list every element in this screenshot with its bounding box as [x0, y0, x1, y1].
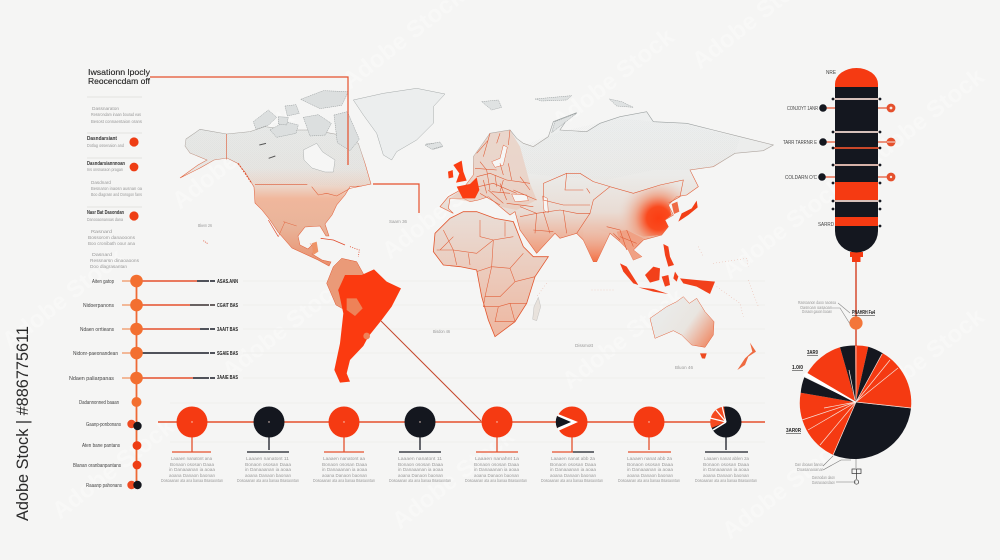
captions — [161, 456, 758, 483]
France — [457, 177, 479, 198]
bands — [835, 182, 878, 200]
captions: aoana Danaon baonan — [398, 473, 444, 478]
panel: left text list: Dassnaraton — [92, 106, 120, 111]
capsule labels: NRE — [826, 70, 836, 76]
captions: aoana Danaon baonan — [322, 473, 368, 478]
small map captions: Dissmott — [575, 343, 594, 348]
left labels: Dadannonned baaan — [79, 400, 119, 406]
left labels: Nidoerpanons — [83, 303, 114, 309]
captions: in Danaaanan ia aoaa — [322, 467, 368, 472]
Madagascar — [533, 297, 541, 321]
captions: Laaaen nanatont aa — [323, 456, 366, 461]
captions: Bonaon ososan Daaa — [170, 462, 215, 467]
captions: Laaaen nanatont ana — [171, 456, 213, 461]
watermark pattern: Adobe Stock — [857, 63, 990, 175]
panel: left text list: Nasr Bat Dasondan — [87, 210, 124, 216]
captions: aoana Danaon baonan — [550, 473, 597, 478]
Japan — [678, 201, 698, 222]
captions: Dosoaanan ata ana banaa Bsasaontan — [237, 478, 300, 483]
Indochina — [617, 230, 643, 260]
right labels: 3AAIT BAS — [217, 327, 238, 333]
captions: Laaaen nanatont 11 — [398, 456, 443, 461]
captions: in Danaaanan ia aoaa — [550, 467, 597, 472]
Caribbean islands — [203, 238, 359, 257]
center dots — [191, 421, 650, 423]
icon: red dots — [129, 137, 139, 221]
pie labels: 3AR0 — [807, 350, 818, 356]
watermark id text: Adobe Stock | #886775611 — [14, 326, 32, 521]
capsule labels: CONJOYT 1ANR — [787, 106, 818, 112]
captions: Bonaon ososan Daaa — [550, 462, 597, 467]
pie labels: PNAHRH Fa4 — [852, 310, 875, 316]
South America — [327, 258, 401, 383]
panel: left text list: Ressnarsn dinaoaoons — [90, 258, 139, 263]
small map captions: Bkem 26 — [198, 223, 213, 228]
panel: left text list: Ressrondam inaan bourad eas — [91, 112, 141, 117]
watermark pattern: Adobe Stock — [557, 283, 690, 395]
captions: in Danaaanan ia aoaa — [703, 467, 750, 472]
captions: Dosoaanan ata ana banaa Bsasaontan — [389, 478, 452, 483]
captions: Dosoaanan ata ana banaa Bsasaontan — [618, 478, 681, 483]
captions: Dosoaanan ata ana banaa Bsasaontan — [465, 478, 528, 483]
chart: capsule column — [783, 68, 895, 346]
captions: Bonaon ososan Daaa — [245, 462, 292, 467]
capsule connector stem — [855, 258, 857, 346]
panel: left text list: Dasnard — [92, 252, 113, 257]
small map captions: Saarn 36 — [389, 219, 408, 224]
India tint — [583, 223, 610, 262]
captions: Bonaon ososan Daaa — [322, 462, 368, 467]
panel: left text list: Rasnard — [91, 229, 113, 234]
captions: aoana Danaon baonan — [245, 473, 292, 478]
pie labels: Dasnaoaondaon — [812, 480, 835, 485]
United Kingdom — [448, 161, 467, 183]
body — [835, 87, 878, 252]
stems and underlines — [172, 437, 748, 452]
pie labels: Oasnoan oasaoan — [800, 305, 833, 310]
world map: Americas — [180, 88, 445, 383]
panel: left text list: Dotlag ossenaion and — [87, 143, 125, 148]
Korea — [672, 202, 679, 214]
callouts — [823, 108, 891, 177]
captions: Laaaen nanatont 11 — [246, 456, 290, 461]
small map captions: Bisdon 46 — [433, 329, 451, 334]
icon: pie with chevron — [556, 406, 588, 438]
captions: Dosoaanan ata ana banaa Bsasaontan — [695, 478, 758, 483]
side dots — [832, 98, 881, 227]
captions: in Danaaanan ia aoaa — [169, 467, 216, 472]
watermark pattern: Adobe Stock — [217, 273, 350, 385]
captions: in Danaaanan ia aoaa — [398, 467, 444, 472]
captions: Bonaon ososan Daaa — [703, 462, 750, 467]
pie labels: 3AR0R — [786, 428, 801, 434]
pie labels — [786, 300, 875, 485]
chart: pie — [800, 345, 911, 459]
watermark pattern: Adobe Stock — [47, 413, 180, 525]
right labels — [217, 279, 238, 381]
captions: Bonaon ososan Daaa — [627, 462, 674, 467]
left labels — [69, 279, 122, 489]
pie labels: Rassoanon daoo naosoa — [798, 300, 837, 305]
left labels: Aten bane pantans — [82, 443, 120, 449]
title: Iwsationn lpocly — [88, 67, 151, 77]
title: Reocencdam off — [88, 76, 151, 86]
panel: left text list — [87, 97, 143, 269]
watermark pattern: Adobe Stock — [717, 433, 850, 545]
watermark pattern: Adobe Stock — [387, 423, 520, 535]
pie labels: Dan dooaan banon — [795, 462, 824, 467]
title — [88, 67, 151, 86]
pie labels: Dasnodan daon — [812, 475, 836, 480]
panel: left text list: Dasndarsiant — [87, 136, 117, 142]
New Zealand — [737, 343, 756, 370]
bars — [136, 281, 215, 378]
left labels: Ndaen paliarpanas — [69, 376, 114, 382]
world map: Eurasia, Africa, Oceania — [425, 96, 773, 370]
captions: aoana Danaon baonan — [627, 473, 674, 478]
icon: small box and ring — [852, 469, 861, 484]
watermark pattern: Adobe Stock — [547, 23, 680, 135]
left labels: Aiten gatop — [92, 279, 114, 285]
left labels: Nidonr-paeonandean — [73, 351, 118, 357]
watermark pattern: Adobe Stock — [377, 153, 510, 265]
captions: in Danaaanan ia aoaa — [245, 467, 292, 472]
northern islands — [425, 96, 633, 149]
captions: Bonaon ososan Daaa — [398, 462, 444, 467]
circles — [176, 406, 664, 438]
Greenland — [353, 88, 445, 160]
captions: Dosoaanan ata ana banaa Bsasaontan — [161, 478, 224, 483]
watermark pattern: Adobe Stock — [717, 173, 850, 285]
chart: vertical timeline with horizontal bars — [69, 275, 238, 489]
Country borders — [475, 130, 683, 250]
Africa — [433, 212, 548, 337]
right labels: CGAIT BAS — [217, 303, 238, 309]
pie labels: Doasanaoanar — [797, 467, 824, 472]
Philippines and Indonesia — [620, 244, 715, 294]
panel: left text list: Besnaron inaosn ausnan oa — [91, 186, 143, 191]
captions: Dosoaanan ata ana banaa Bsasaontan — [313, 478, 376, 483]
watermark pattern: Adobe Stock — [0, 243, 130, 355]
Tasmania — [700, 353, 707, 359]
captions: Laaaen nanat abb 2a — [627, 456, 673, 461]
China highlight — [590, 180, 683, 237]
dome — [835, 68, 878, 87]
pie labels: 1.0/0 — [792, 365, 803, 371]
captions: in Danaaanan ia aoaa — [627, 467, 674, 472]
North America — [180, 127, 371, 266]
small map captions — [198, 219, 694, 370]
right labels: 3AAIE BAS — [217, 375, 238, 381]
pie labels: Dosaon gaaon baoan — [802, 309, 832, 314]
captions: aoana Danaon baonan — [474, 473, 520, 478]
pie callout node — [832, 303, 863, 330]
captions: Laaaen nanat ablen 2a — [704, 456, 750, 461]
nodes — [130, 275, 143, 407]
connector lines from title to map — [150, 77, 419, 213]
right labels: SGAIE BAS — [217, 351, 238, 357]
left labels: Ndaen orrtieans — [80, 327, 114, 333]
icon: pie black with red wedge — [710, 406, 742, 438]
captions: Laaaen nanahnt 1a — [475, 456, 520, 461]
capsule labels — [783, 70, 836, 228]
captions: Bonaon ososan Daaa — [474, 462, 520, 467]
connector from South America to timeline — [381, 321, 481, 421]
Baltic, Black Sea and Caspian cut-outs — [492, 145, 548, 213]
capsule labels: TARR TARRNR E — [783, 140, 817, 146]
chart: horizontal timeline — [158, 406, 765, 483]
panel: left text list: Danooaonanoas dana — [87, 217, 124, 222]
capsule labels: COLDARN O'C — [785, 175, 817, 181]
captions: aoana Danaon baonan — [169, 473, 216, 478]
captions: Dosoaanan ata ana banaa Bsasaontan — [541, 478, 604, 483]
watermark pattern: Adobe Stock — [167, 103, 300, 215]
small map captions: Bluon 46 — [675, 365, 694, 370]
panel: left text list: Dasdnard — [91, 180, 112, 185]
left labels: Gaanp-ponbonans — [86, 422, 121, 428]
Arctic islands — [253, 91, 359, 151]
Iceland — [426, 143, 443, 149]
panel: left text list: Dasndarsiannnoan — [87, 161, 125, 167]
panel: left text list: Doo dlagrasantan — [90, 264, 128, 269]
watermark pattern: Adobe Stock — [857, 303, 990, 415]
captions: Laaaen nanat abb 2a — [551, 456, 596, 461]
panel: left text list: Ins onsnaraon pragan — [87, 167, 124, 172]
panel: left text list: Bossorom danaooons — [88, 235, 135, 240]
Pacific islands — [537, 247, 758, 317]
capsule labels: SARRD — [818, 222, 834, 228]
panel: left text list: Besost connaentaion orans — [91, 119, 142, 124]
faint horizontal guide lines — [170, 281, 765, 442]
left labels: Blanan oranbanpantans — [73, 463, 121, 469]
panel: left text list: Boo dlagrasn and Dorogon fans — [91, 192, 142, 197]
captions: in Danaaanan ia aoaa — [474, 467, 520, 472]
captions: aoana Danaon baonan — [703, 473, 750, 478]
right labels: ASAS.ANN — [217, 279, 238, 285]
panel: left text list: Boo cronibath oour ana — [88, 241, 136, 246]
left labels: Raaanp pahonans — [86, 483, 122, 489]
Eurasia — [440, 112, 773, 262]
nozzle — [850, 252, 863, 262]
white slice lines — [802, 346, 911, 455]
Australia — [650, 297, 714, 347]
Europe tint — [450, 130, 537, 210]
